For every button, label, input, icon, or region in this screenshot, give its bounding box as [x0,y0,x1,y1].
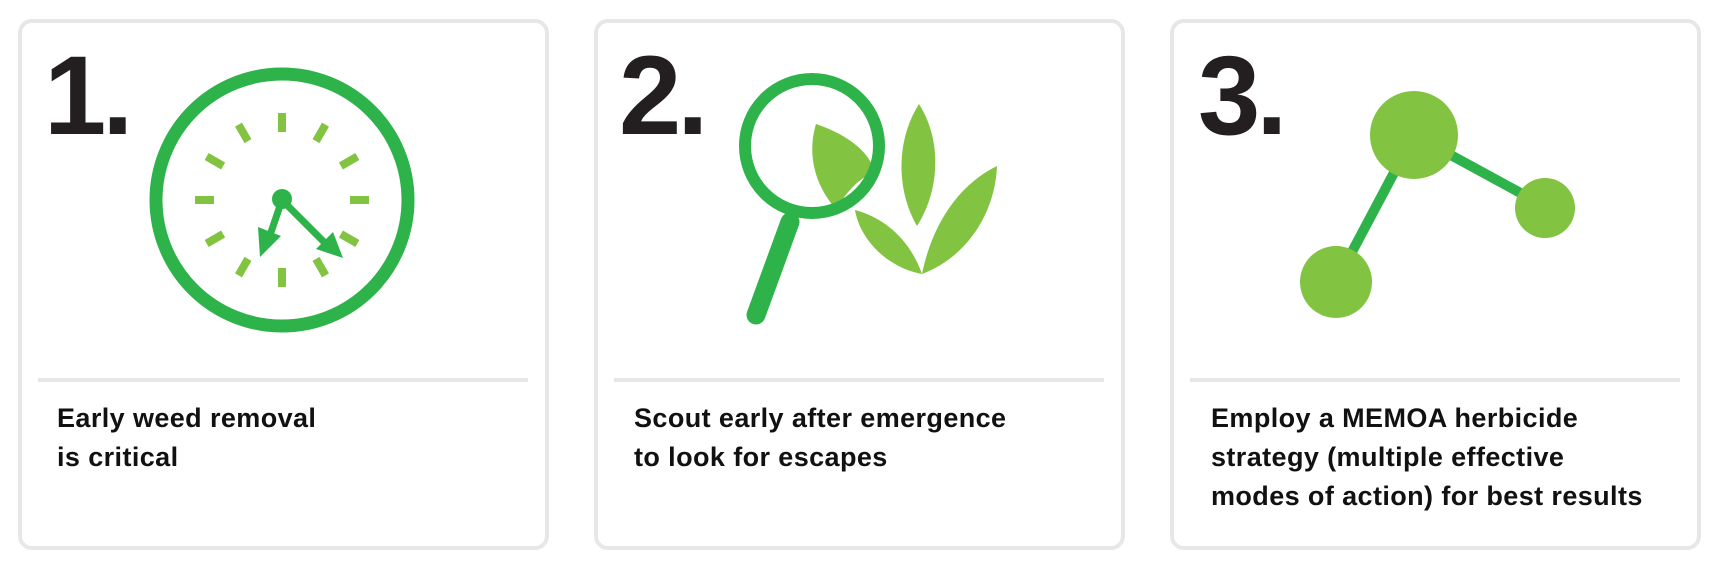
text 3 [1211,403,1643,511]
icon: molecule [1300,91,1575,318]
text 3: Employ a MEMOA herbicide [1211,403,1578,433]
text 3: modes of action) for best results [1211,481,1643,511]
number 3: 3. [1198,33,1283,158]
panel: 3 [1170,19,1701,550]
text 3: strategy (multiple effective [1211,442,1564,472]
panel: 2 [594,19,1125,550]
text 2: Scout early after emergence [634,403,1006,433]
icon: leaves [812,104,997,274]
icon: magnifier [745,79,879,315]
icon: clock [156,74,408,326]
number 2: 2. [619,33,704,158]
text 2: to look for escapes [634,442,888,472]
text 1 [57,403,316,472]
panel: 1 [18,19,549,550]
text 1: is critical [57,442,178,472]
number 1: 1. [44,33,129,158]
text 1: Early weed removal [57,403,316,433]
text 2 [634,403,1006,472]
